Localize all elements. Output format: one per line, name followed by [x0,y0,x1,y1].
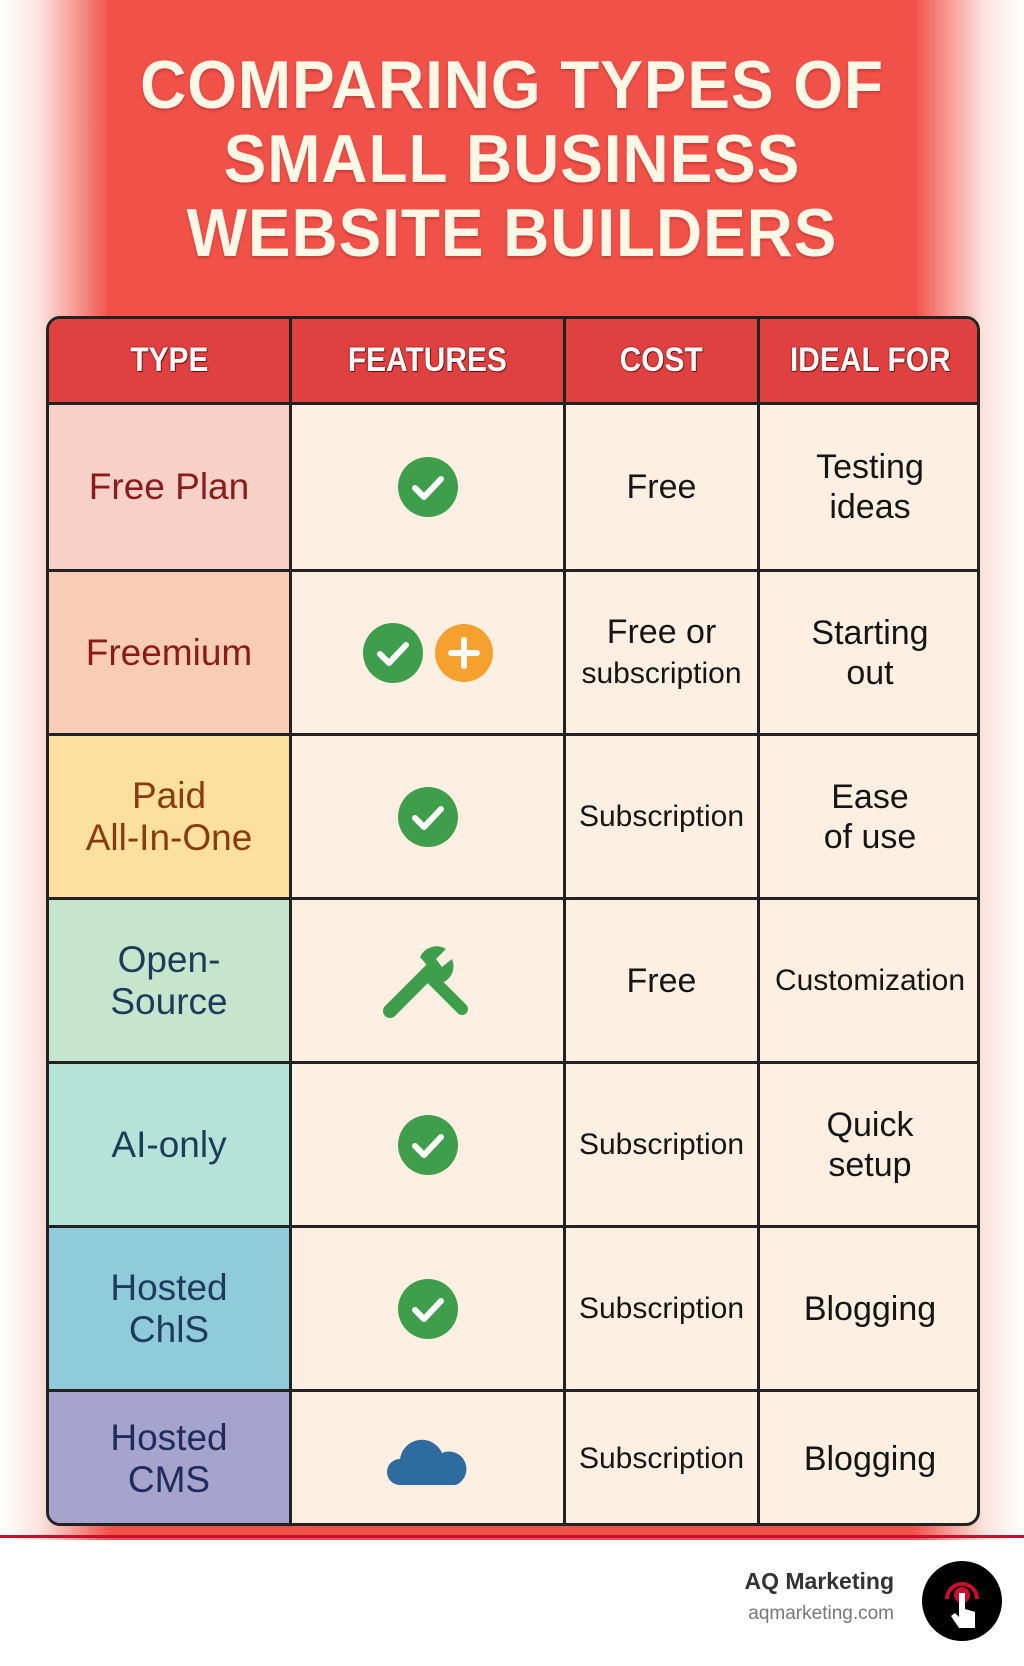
row 4: Open-Source: Customization [775,964,965,996]
header: cost: COST [620,341,703,379]
row 6: Hosted ChlS: Blogging [804,1290,936,1328]
row 5: AI-only: Quick [827,1106,913,1144]
row 2: Freemium [49,572,977,736]
row 7: Hosted CMS: Blogging [804,1440,936,1478]
row 3: Paid All-In-One [49,736,977,900]
header: features: FEATURES [348,341,507,379]
footer brand text: aqmarketing.com [748,1603,894,1624]
row 1: Free Plan: Testing [816,448,924,486]
footer brand text: AQ Marketing [744,1568,894,1594]
icon: check [292,405,566,572]
row 5: AI-only: Subscription [579,1128,744,1160]
row 1: Free Plan [49,405,977,572]
red divider line [0,1535,1024,1538]
header: ideal for: IDEAL FOR [790,341,950,379]
row 3: Paid All-In-One: of use [824,818,916,856]
row 2: Freemium: Freemium [86,632,252,672]
row 4: Open-Source: Source [110,980,228,1022]
header: type: TYPE [130,341,208,379]
row 4: Open-Source: Open- [118,938,220,980]
icon: check [292,1064,566,1228]
title: COMPARING TYPES OF [140,47,884,123]
icon: cloud [292,1392,566,1526]
row 4: Open-Source: Free [627,962,696,1000]
title: WEBSITE BUILDERS [187,195,837,271]
row 3: Paid All-In-One: Paid [132,774,206,816]
row 7: Hosted CMS [49,1392,936,1523]
footer brand text [744,1568,894,1624]
title: SMALL BUSINESS [224,121,800,197]
row 7: Hosted CMS: CMS [128,1459,210,1500]
title [140,47,884,271]
row 2: Freemium: Free or [607,612,716,650]
row 5: AI-only: setup [828,1146,912,1184]
icon: check [292,1228,566,1392]
header: cost [566,319,760,405]
row 1: Free Plan: Free Plan [89,466,249,507]
row 6: Hosted ChlS: Hosted [110,1266,228,1308]
row 7: Hosted CMS: Subscription [579,1442,744,1475]
row 3: Paid All-In-One: Subscription [579,800,744,832]
row 6: Hosted ChlS [49,1228,977,1392]
row 2: Freemium: Starting [811,614,929,652]
row 5: AI-only [49,1064,977,1228]
row 6: Hosted ChlS: ChlS [129,1308,209,1350]
header: ideal for [760,319,980,405]
row 6: Hosted ChlS: Subscription [579,1292,744,1324]
row 1: Free Plan: Free [627,468,696,506]
row 1: Free Plan: ideas [829,488,911,526]
header: features [292,319,566,405]
row 7: Hosted CMS: Hosted [110,1417,228,1458]
row 3: Paid All-In-One: Ease [831,778,909,816]
comparison table [46,316,980,1526]
icon: wrench [292,900,566,1064]
icon: logo [922,1561,1002,1641]
row 3: Paid All-In-One: All-In-One [86,816,252,858]
icon: check [292,736,566,900]
icon: check and plus [292,572,566,736]
row 5: AI-only: AI-only [111,1124,227,1164]
header: type [49,319,292,405]
row 2: Freemium: subscription [581,656,742,690]
row 2: Freemium: out [846,654,894,692]
row 4: Open-Source [49,900,977,1064]
